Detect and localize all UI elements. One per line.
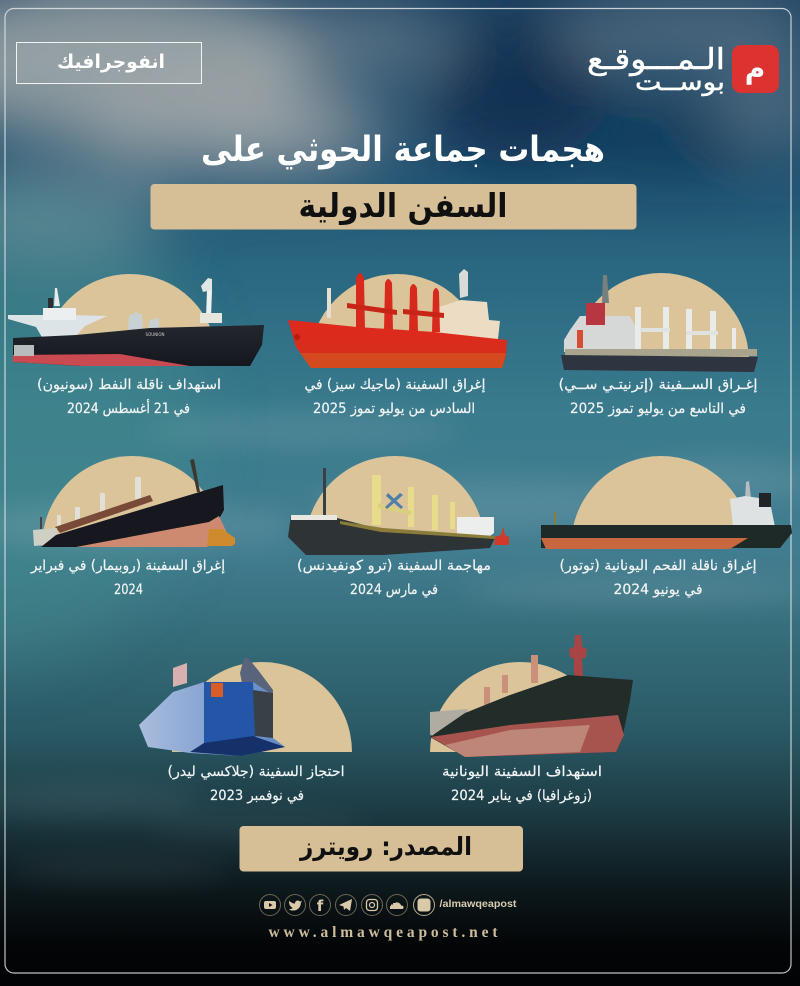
dome [430, 662, 610, 752]
dome [571, 456, 751, 546]
icon: facebook: f [317, 897, 324, 915]
caption: في مارس 2024 [350, 582, 438, 598]
ship [8, 278, 264, 366]
tag: infographic: انفوجرافيك [57, 51, 165, 73]
tag: infographic [16, 42, 202, 84]
ship: SOUNION [146, 332, 164, 337]
caption [560, 558, 757, 598]
caption: إغـراق الســفينة (إترنيتـي ســي) [558, 377, 758, 393]
caption: في يونيو 2024 [614, 582, 702, 598]
caption: إغراق السفينة (ماجيك سيز) في [304, 377, 486, 393]
caption: في نوفمبر 2023 [210, 788, 304, 804]
ship [33, 459, 235, 547]
icon: soundcloud [386, 894, 408, 916]
caption: (زوغرافيا) في يناير 2024 [451, 788, 592, 804]
social handle: /almawqeapost [440, 898, 517, 910]
ship [541, 481, 792, 549]
logo wordmark: بوســت [635, 68, 725, 96]
caption: 2024 [114, 582, 143, 598]
caption [442, 764, 602, 804]
caption: في التاسع من يوليو تموز 2025 [570, 401, 746, 417]
ship [430, 635, 633, 757]
ship card: Tutor [541, 456, 792, 598]
social icons [260, 894, 434, 916]
caption: السادس من يوليو تموز 2025 [313, 401, 475, 417]
dome [573, 273, 749, 361]
source bar [240, 826, 523, 872]
dome [43, 274, 217, 361]
icon: almawqea app [414, 894, 434, 916]
icon: facebook [310, 894, 330, 916]
caption [168, 764, 344, 804]
subtitle bar [150, 184, 636, 230]
caption [37, 377, 221, 417]
ship card: Eternity C [558, 273, 758, 417]
icon: twitter [284, 894, 306, 916]
caption [297, 558, 491, 598]
dome [172, 662, 352, 752]
caption [304, 377, 486, 417]
caption: احتجاز السفينة (جلاكسي ليدر) [168, 764, 344, 780]
logo icon [732, 45, 779, 93]
ship card: True Confidence [288, 456, 509, 598]
icon: youtube [260, 894, 280, 916]
caption: إغراق ناقلة الفحم اليونانية (توتور) [560, 558, 757, 574]
caption: في 21 أغسطس 2024 [67, 399, 190, 417]
ship card: Rubymar [30, 456, 235, 598]
ship card: Sounion [8, 274, 264, 417]
ship [288, 269, 507, 368]
dome [42, 456, 222, 546]
caption: استهداف ناقلة النفط (سونيون) [37, 377, 221, 393]
ship [139, 658, 285, 756]
subtitle bar: السفن الدولية [298, 186, 508, 226]
logo [587, 42, 779, 96]
ship [561, 275, 758, 372]
caption: استهداف السفينة اليونانية [442, 764, 602, 780]
icon: telegram [336, 894, 356, 916]
caption [30, 558, 225, 598]
dome [310, 274, 484, 361]
logo wordmark [587, 42, 725, 96]
caption: مهاجمة السفينة (ترو كونفيدنس) [297, 558, 491, 574]
logo icon: م [745, 52, 765, 85]
ship [288, 468, 509, 555]
website: www.almawqeapost.net [268, 924, 498, 941]
ship card: Magic Seas [288, 269, 507, 417]
icon: instagram [362, 894, 382, 916]
ship card: Galaxy Leader [139, 658, 352, 804]
caption [558, 377, 758, 417]
title: هجمات جماعة الحوثي على [201, 130, 605, 170]
logo wordmark: الـمـــوقـع [587, 42, 725, 76]
dome [305, 456, 485, 546]
source bar: المصدر: رويترز [298, 832, 472, 862]
caption: إغراق السفينة (روبيمار) في فبراير [30, 558, 225, 574]
ship card: Zografia [430, 635, 633, 804]
